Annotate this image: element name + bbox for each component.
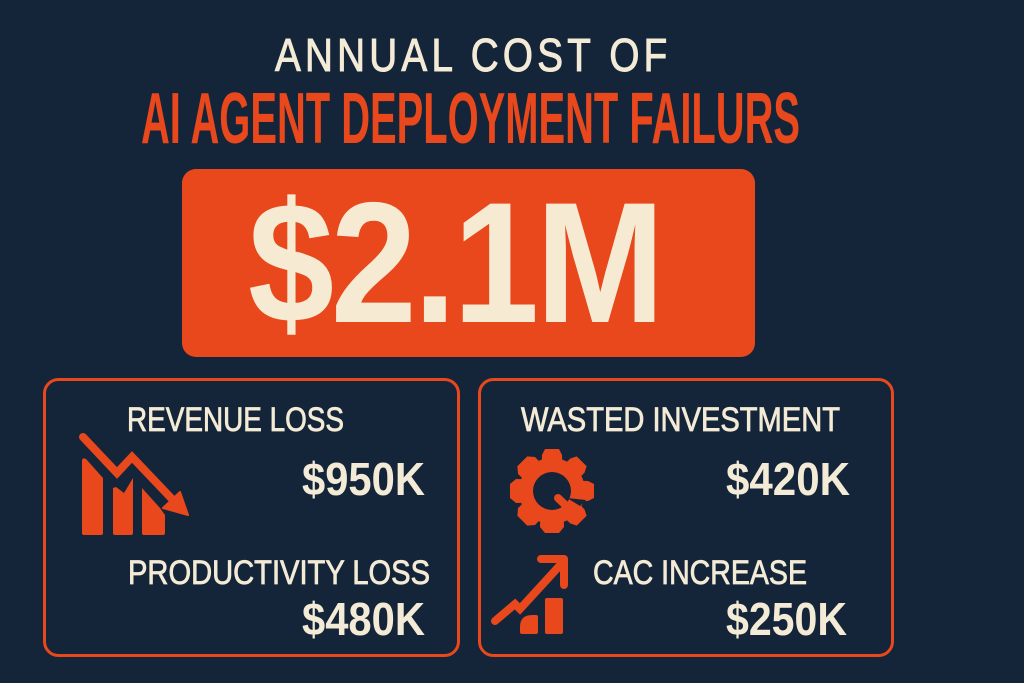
label: wasted investment: WASTED INVESTMENT [521,401,840,439]
icon: gear [510,449,594,533]
value: CAC increase: $250K [726,593,847,645]
value: wasted investment: $420K [726,453,850,505]
label: CAC increase: CAC INCREASE [593,554,807,592]
label: revenue loss: REVENUE LOSS [127,401,344,439]
total value: $2.1M [248,166,665,359]
value: productivity loss: $480K [302,593,425,645]
banner: total cost [182,166,755,359]
panel: wasted investment and CAC increase [480,380,892,656]
label: productivity loss: PRODUCTIVITY LOSS [128,554,430,592]
title: annual cost of: ANNUAL COST OF [275,30,667,81]
icon: falling bar chart [82,437,188,535]
panel: revenue and productivity loss [44,380,458,656]
icon: rising arrow with bars [495,559,564,634]
value: revenue loss: $950K [302,453,425,505]
